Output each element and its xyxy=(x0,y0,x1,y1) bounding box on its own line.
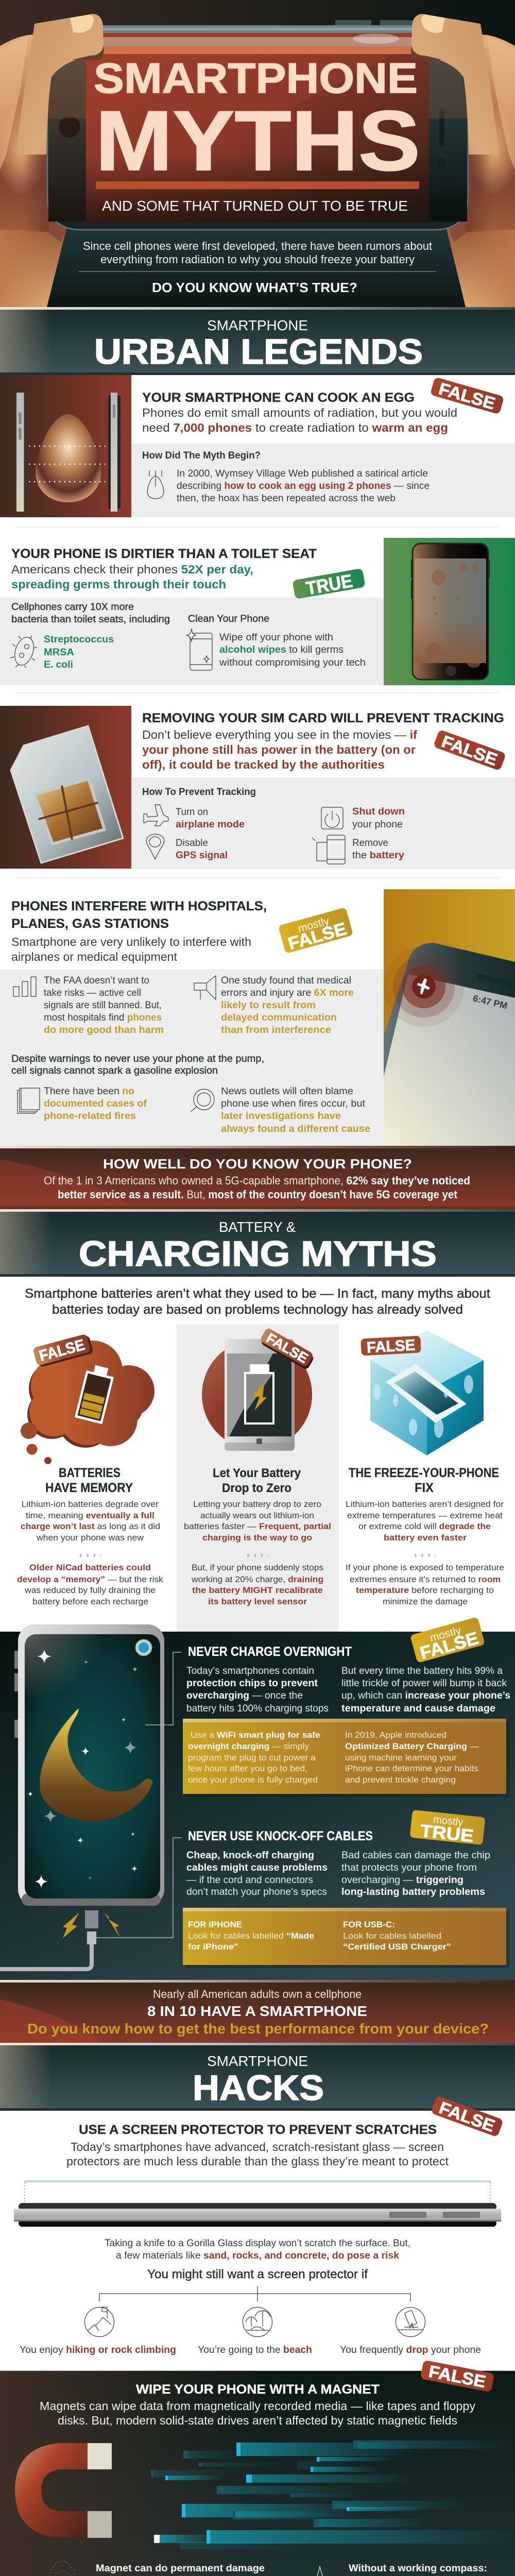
list: bacteria names: E. coli xyxy=(44,659,73,670)
lead text: Americans check their phones 52X per day, xyxy=(11,563,253,576)
heading: YOUR PHONE IS DIRTIER THAN A TOILET SEAT xyxy=(11,547,317,561)
illustration: egg between two phones xyxy=(0,375,131,517)
text block: battery even faster xyxy=(384,1533,467,1543)
section header: urban legends: SMARTPHONE xyxy=(207,317,308,333)
text: working compass: Without a working compass: xyxy=(349,2563,487,2574)
heading: never use knock-off cables: NEVER USE KNOCK-OFF CABLES xyxy=(188,1829,373,1843)
stamp: false xyxy=(430,377,504,415)
question heading: DO YOU KNOW WHAT’S TRUE? xyxy=(152,280,357,295)
panel: interference myth xyxy=(0,889,515,1146)
banner: how well do you know your phone: HOW WELL DO YOU KNOW YOUR PHONE? xyxy=(103,1156,412,1172)
battery intro text: Smartphone batteries aren’t what they used to be — In fact, many myths about xyxy=(25,1286,490,1301)
icon: magnifying glass xyxy=(191,1089,214,1112)
callout: overnight tips: overnight charging — simply xyxy=(188,1741,310,1751)
text block: its battery level sensor xyxy=(208,1597,307,1606)
text: gorilla glass xyxy=(105,2238,410,2261)
panel: sim card myth xyxy=(0,706,515,869)
title: MYTHS xyxy=(95,93,420,188)
grey detail panel xyxy=(0,969,384,1146)
hero: phone held in two hands xyxy=(0,0,515,309)
text: myth origin: In 2000, Wymsey Village Web published a satirical article xyxy=(177,468,428,479)
text block: batteries faster — Frequent, partial xyxy=(184,1521,331,1531)
illustration: sim card xyxy=(0,706,131,869)
battery intro text: batteries today are based on problems technology has already solved xyxy=(52,1302,463,1317)
text: gps xyxy=(176,838,228,861)
illustration: phone in airplane mode xyxy=(384,889,515,1146)
illustration: cable with sparks xyxy=(0,1910,121,1969)
icon: crescent moon xyxy=(40,1708,153,1821)
text: pump warning xyxy=(11,1054,264,1076)
stamp: mostly true xyxy=(409,1810,485,1847)
banner: how well do you know your phone: better service as a result. But, most of the country doesn’t have 5G coverage yet xyxy=(58,1188,458,1201)
lead text: Smartphone are very unlikely to interfere with xyxy=(11,935,251,948)
text block: Letting your battery drop to zero xyxy=(193,1499,321,1509)
text: airplane mode: Turn on xyxy=(176,807,208,818)
heading: YOUR SMARTPHONE CAN COOK AN EGG xyxy=(142,391,415,405)
text: wipe off: alcohol wipes to kill germs xyxy=(219,645,344,655)
text block: charge won’t last as long as it did xyxy=(21,1521,160,1531)
text block: Lithium-ion batteries degrade over xyxy=(22,1499,159,1509)
icon: clean phone xyxy=(186,629,212,670)
text: gps: Disable xyxy=(176,838,208,849)
icon: mountain xyxy=(84,2307,114,2337)
text: FAA xyxy=(44,975,164,1036)
stamp: false: FALSE xyxy=(366,1337,416,1356)
title: BATTERIES xyxy=(59,1466,121,1480)
text block: time, meaning eventually a full xyxy=(26,1511,154,1520)
text: medical study: than from interference xyxy=(221,1025,331,1036)
text: airplane mode: airplane mode xyxy=(176,819,245,830)
section header: battery and charging myths xyxy=(0,1209,515,1277)
lead text: need 7,000 phones to create radiation to warm an egg xyxy=(142,421,448,434)
subtitle: AND SOME THAT TURNED OUT TO BE TRUE xyxy=(102,198,408,214)
stamp: mostly true: mostly xyxy=(433,1814,464,1828)
heading: never charge overnight: NEVER CHARGE OVERNIGHT xyxy=(188,1645,352,1659)
banner: how well do you know your phone xyxy=(0,1146,515,1209)
icon: bacteria xyxy=(10,635,37,668)
text: reasons: You’re going to the beach xyxy=(198,2345,312,2355)
grey detail panel: How Did The Myth Begin? xyxy=(142,450,261,461)
title: Let Your Battery xyxy=(213,1466,301,1480)
icon: compass question mark xyxy=(295,2567,346,2576)
text: bad cables: long-lasting battery problems xyxy=(341,1887,485,1897)
intro text: everything from radiation to why you should freeze your battery xyxy=(100,253,415,266)
illustration: phone side with protector xyxy=(14,2180,501,2227)
illustration: phone and battery xyxy=(202,1339,312,1451)
middle column background xyxy=(177,1325,339,1632)
text: medical study xyxy=(221,975,354,1036)
text block: extremes ensure it’s returned to room xyxy=(350,1574,501,1584)
heading: PHONES INTERFERE WITH HOSPITALS, xyxy=(11,899,267,913)
panel: charging myths dark section xyxy=(0,1617,515,1980)
text block: Lithium-ion batteries aren’t designed for xyxy=(346,1499,504,1509)
intro text xyxy=(79,240,436,272)
icon: egg xyxy=(147,470,164,499)
title xyxy=(45,1466,133,1495)
illustration: thought cloud with battery xyxy=(21,1341,154,1464)
intro text: Since cell phones were first developed, there have been rumors about xyxy=(83,240,432,252)
title underline bar xyxy=(96,181,419,189)
grey detail panel xyxy=(131,777,515,869)
connector lines xyxy=(93,1652,181,1938)
heading: PLANES, GAS STATIONS xyxy=(11,917,169,931)
text block: when your phone was new xyxy=(36,1533,144,1543)
sub-heading: You might still want a screen protector if xyxy=(147,2267,368,2281)
callout: overnight tips xyxy=(183,1719,509,1797)
callout: overnight tips: using machine learning your xyxy=(345,1753,457,1762)
text block: But, if your phone suddenly stops xyxy=(192,1563,323,1572)
callout: overnight tips: iPhone can determine your habits xyxy=(345,1764,478,1773)
banner: how well do you know your phone: Of the 1 in 3 Americans who owned a 5G-capable smartphone, 62% say they’ve noticed xyxy=(44,1174,470,1187)
stamp: false xyxy=(420,2360,494,2393)
stamp: false xyxy=(433,729,506,771)
lead text: Magnets can wipe data from magnetically recorded media — like tapes and floppy xyxy=(40,2399,476,2413)
text: cheap cables: don’t match your phone’s specs xyxy=(186,1887,327,1897)
battery intro text xyxy=(25,1286,490,1317)
section header: smartphone hacks: SMARTPHONE xyxy=(207,2053,308,2069)
illustration: phone at night xyxy=(14,1624,164,1906)
section header: battery and charging myths: BATTERY & xyxy=(219,1219,296,1235)
text block: minimize the damage xyxy=(383,1597,468,1606)
text: bacteria: bacteria than toilet seats, including xyxy=(11,614,170,625)
text: gorilla glass: a few materials like sand, rocks, and concrete, do pose a risk xyxy=(116,2250,399,2261)
text: trickle of power: little trickle of power will bump it back xyxy=(341,1678,507,1689)
heading: REMOVING YOUR SIM CARD WILL PREVENT TRACKING xyxy=(142,711,504,725)
stamp: mostly false: mostly xyxy=(428,1624,462,1644)
text: cheap cables xyxy=(186,1850,328,1897)
text block xyxy=(346,1499,504,1606)
grey detail panel xyxy=(131,444,515,517)
right thumb xyxy=(411,14,500,155)
lead text: spreading germs through their touch xyxy=(11,578,226,591)
grey detail panel: How To Prevent Tracking xyxy=(142,787,256,798)
text: shut down: Shut down xyxy=(352,806,405,817)
illustration: phone in airplane mode: 6:47 PM xyxy=(472,993,508,1011)
text: cheap cables: Cheap, knock-off charging xyxy=(186,1850,314,1861)
text: bacteria xyxy=(11,602,170,625)
text: documented cases xyxy=(44,1086,147,1122)
text: medical study: errors and injury are 6X more xyxy=(221,988,354,998)
title xyxy=(94,54,420,188)
text: bad cables: Bad cables can damage the chip xyxy=(341,1850,490,1861)
stamp: mostly false: mostly xyxy=(297,915,331,935)
callout: overnight tips: program the plug to cut power a xyxy=(188,1753,316,1762)
illustration: phone in ice xyxy=(370,1330,484,1455)
text: battery: Remove xyxy=(352,838,388,849)
text block: develop a “memory” — but the risk xyxy=(17,1574,164,1584)
text block: Older NiCad batteries could xyxy=(29,1563,151,1572)
section header: urban legends: URBAN LEGENDS xyxy=(94,332,423,371)
text block: charging is the way to go xyxy=(202,1533,312,1543)
phone body xyxy=(47,20,468,230)
stamp: false: FALSE xyxy=(264,1330,311,1366)
column: freeze your phone xyxy=(346,1330,504,1606)
section header: smartphone hacks xyxy=(0,2043,515,2111)
text: wipe off: Wipe off your phone with xyxy=(219,632,333,643)
lead text xyxy=(40,2399,476,2427)
text block xyxy=(184,1499,331,1606)
callout: overnight tips: once your phone is fully charged xyxy=(188,1775,318,1785)
title xyxy=(349,1466,499,1495)
text: documented cases: documented cases of xyxy=(44,1098,147,1109)
left thumb xyxy=(15,14,104,155)
grey detail panel xyxy=(0,598,384,685)
callout: overnight tips: few hours after you go to bed, xyxy=(188,1764,307,1773)
illustration: horseshoe magnet xyxy=(15,2443,112,2538)
text: reasons: You enjoy hiking or rock climbing xyxy=(20,2345,176,2355)
text: myth origin xyxy=(177,468,430,504)
lead text: disks. But, modern solid-state drives aren’t affected by static magnetic fields xyxy=(58,2414,457,2427)
stamp: false xyxy=(259,1327,316,1370)
callout: overnight tips: Use a WiFi smart plug for safe xyxy=(191,1730,320,1740)
text: medical study: likely to result from xyxy=(221,1000,316,1011)
text: battery: the battery xyxy=(352,850,404,861)
stamp: true: TRUE xyxy=(304,570,354,599)
text: medical study: delayed communication xyxy=(221,1012,337,1023)
text: battery xyxy=(352,838,404,861)
lead text: Today’s smartphones have advanced, scratch-resistant glass — screen xyxy=(71,2140,444,2154)
text: FAA: most hospitals find phones xyxy=(44,1012,162,1023)
icon: megaphone xyxy=(194,976,216,999)
illustration: germy phone xyxy=(384,538,515,685)
callout: cable labels: FOR iPHONE xyxy=(188,1920,242,1929)
panel: magnet myth dark section xyxy=(0,2360,515,2576)
lead text: your phone still has power in the battery (on or xyxy=(142,743,416,756)
title: FIX xyxy=(415,1481,434,1495)
icon: stars xyxy=(28,1649,138,1888)
stamp: false: FALSE xyxy=(38,1336,87,1365)
section header: smartphone hacks: HACKS xyxy=(193,2068,324,2108)
callout: overnight tips: In 2019, Apple introduced xyxy=(345,1730,447,1740)
text: trickle of power: temperature and cause damage xyxy=(341,1703,495,1714)
heading: USE A SCREEN PROTECTOR TO PREVENT SCRATCHES xyxy=(79,2123,437,2137)
banner: 8 in 10 have a smartphone xyxy=(0,1980,515,2043)
lead text: airplanes or medical equipment xyxy=(11,950,178,963)
text: documented cases: phone-related fires xyxy=(44,1111,136,1122)
heading xyxy=(11,899,267,931)
text block: battery before each recharge xyxy=(32,1597,148,1606)
text: medical study: One study found that medical xyxy=(221,975,351,986)
text block: temperature before recharging to xyxy=(356,1585,494,1595)
callout: cable labels: for iPhone” xyxy=(188,1942,238,1952)
text: pump warning: cell signals cannot spark a gasoline explosion xyxy=(11,1065,218,1076)
text: news outlets: News outlets will often blame xyxy=(221,1086,353,1097)
icon: dropped phone xyxy=(396,2307,425,2337)
lead text: Don’t believe everything you see in the movies — if xyxy=(142,728,417,741)
stamp: mostly false xyxy=(278,907,354,955)
list: bacteria names: Streptococcus xyxy=(44,634,114,645)
text: shut down xyxy=(352,806,405,830)
column: batteries have memory xyxy=(17,1333,164,1606)
panel: toilet seat myth xyxy=(0,538,515,685)
title: HAVE MEMORY xyxy=(45,1481,133,1495)
list: bacteria names: MRSA xyxy=(44,647,74,658)
icon: airplane xyxy=(144,805,168,826)
tree connector xyxy=(99,2286,410,2301)
text: protection chips: overcharging — once the xyxy=(186,1690,303,1701)
lead text: off), it could be tracked by the authorities xyxy=(142,758,385,771)
text: trickle of power: up, which can increase your phone’s xyxy=(341,1690,510,1701)
text: protection chips xyxy=(186,1666,329,1714)
text: trickle of power: But every time the battery hits 99% a xyxy=(341,1666,503,1676)
text: myth origin: then, the hoax has been repeated across the web xyxy=(177,493,396,504)
list: bacteria names xyxy=(44,634,114,670)
panel: screen protector myth xyxy=(14,2095,504,2355)
column: let battery drop to zero xyxy=(184,1327,331,1606)
icon: power xyxy=(321,807,343,829)
stamp: false: FALSE xyxy=(437,379,497,413)
text: cheap cables: — if the cord and connectors xyxy=(186,1875,313,1886)
stamp: mostly false xyxy=(410,1617,486,1665)
title xyxy=(213,1466,301,1495)
section header: battery and charging myths: CHARGING MYTHS xyxy=(79,1234,437,1274)
text: FAA: signals are still banned. But, xyxy=(44,1000,162,1011)
text: gorilla glass: Taking a knife to a Gorilla Glass display won’t scratch the surface. But, xyxy=(105,2238,410,2249)
text: documented cases: There have been no xyxy=(44,1086,134,1097)
stamp: false xyxy=(431,2095,504,2138)
text: shut down: your phone xyxy=(352,819,403,830)
text: bad cables: overcharging — triggering xyxy=(341,1875,464,1886)
stamp: false: FALSE xyxy=(427,2362,487,2391)
text: FAA: The FAA doesn’t want to xyxy=(44,975,149,986)
text: reasons xyxy=(20,2345,481,2355)
icon: beach island xyxy=(243,2307,272,2337)
callout: cable labels: “Certified USB Charger” xyxy=(343,1942,451,1952)
icon: location pin xyxy=(146,834,164,859)
callout: overnight tips: Optimized Battery Charging — xyxy=(345,1741,479,1751)
text: news outlets xyxy=(221,1086,370,1134)
text: wipe off: without compromising your tech xyxy=(219,657,366,668)
icon: phone battery xyxy=(312,835,345,864)
text: news outlets: always found a different cause xyxy=(221,1124,370,1134)
sub-heading: Clean Your Phone xyxy=(188,614,269,624)
title: Drop to Zero xyxy=(222,1481,291,1495)
text block: working at 20% charge, draining xyxy=(191,1574,323,1584)
stamp: mostly false: FALSE xyxy=(286,919,349,954)
banner: 8 in 10 have a smartphone: Do you know how to get the best performance from your device? xyxy=(27,2021,489,2037)
text: bad cables: that protects your phone from xyxy=(341,1862,477,1873)
text: news outlets: phone use when fires occur, but xyxy=(221,1098,366,1109)
text: reasons: You frequently drop your phone xyxy=(340,2345,481,2355)
banner: 8 in 10 have a smartphone: Nearly all American adults own a cellphone xyxy=(153,1988,362,2001)
text block: the battery MIGHT recalibrate xyxy=(192,1585,323,1595)
text: cheap cables: cables might cause problems xyxy=(186,1862,328,1873)
text: protection chips: protection chips to prevent xyxy=(186,1678,318,1689)
text: FAA: do more good than harm xyxy=(44,1025,164,1036)
illustration: data streaks xyxy=(151,2441,515,2549)
lead text: protectors are much less durable than the glass they’re meant to protect xyxy=(66,2155,449,2168)
banner: 8 in 10 have a smartphone: 8 IN 10 HAVE A SMARTPHONE xyxy=(147,2003,367,2019)
text: protection chips: battery hits 100% charging stops xyxy=(186,1703,329,1714)
icon: signal bars xyxy=(13,977,36,996)
text: gps: GPS signal xyxy=(176,850,228,861)
text block: extreme temperatures — extreme heat xyxy=(347,1511,503,1520)
icon: documents xyxy=(18,1088,40,1113)
lead text xyxy=(142,406,457,434)
stamp: false: FALSE xyxy=(439,732,500,769)
text block: was reduced by fully draining the xyxy=(24,1585,156,1595)
callout: cable labels xyxy=(183,1908,509,1968)
text: airplane mode xyxy=(176,807,245,830)
text: permanent damage: Magnet can do permanent damage xyxy=(96,2563,265,2574)
text block: actually wears out lithium-ion xyxy=(200,1511,314,1520)
stamp: false: FALSE xyxy=(437,2098,497,2136)
text: bacteria: Cellphones carry 10X more xyxy=(11,602,134,613)
section header: urban legends xyxy=(0,307,515,375)
icon: phone with magnetic field xyxy=(47,2561,78,2576)
text: pump warning: Despite warnings to never use your phone at the pump, xyxy=(11,1054,264,1064)
callout: cable labels: Look for cables labelled “Made xyxy=(188,1931,314,1941)
text: news outlets: later investigations have xyxy=(221,1111,341,1122)
lead text xyxy=(11,935,251,963)
lead text xyxy=(11,563,253,591)
text: myth origin: describing how to cook an egg using 2 phones — since xyxy=(177,481,430,492)
right hand xyxy=(443,31,515,307)
panel: egg myth xyxy=(0,375,515,517)
text: protection chips: Today’s smartphones contain xyxy=(186,1666,314,1676)
lead text: Phones do emit small amounts of radiation, but you would xyxy=(142,406,457,419)
callout: overnight tips: and prevent trickle charging xyxy=(345,1775,456,1785)
callout: cable labels: Look for cables labelled xyxy=(343,1931,441,1941)
lead text xyxy=(142,728,417,771)
title: SMARTPHONE xyxy=(94,54,418,102)
stamp: mostly false: FALSE xyxy=(418,1629,480,1663)
text: trickle of power xyxy=(341,1666,510,1714)
text block: or extreme cold will degrade the xyxy=(358,1521,491,1531)
left hand xyxy=(0,31,72,307)
text: FAA: take risks — active cell xyxy=(44,988,141,998)
text: bad cables xyxy=(341,1850,490,1897)
text block: If your phone is exposed to temperature xyxy=(346,1563,504,1572)
heading: WIPE YOUR PHONE WITH A MAGNET xyxy=(136,2382,380,2397)
text block xyxy=(17,1499,164,1606)
stamp: mostly true: TRUE xyxy=(419,1821,474,1846)
stamp: true xyxy=(292,568,366,601)
text: wipe off xyxy=(219,632,366,668)
callout: cable labels: FOR USB-C: xyxy=(343,1920,395,1929)
panel below the phone xyxy=(47,227,466,307)
lead text xyxy=(66,2140,449,2168)
